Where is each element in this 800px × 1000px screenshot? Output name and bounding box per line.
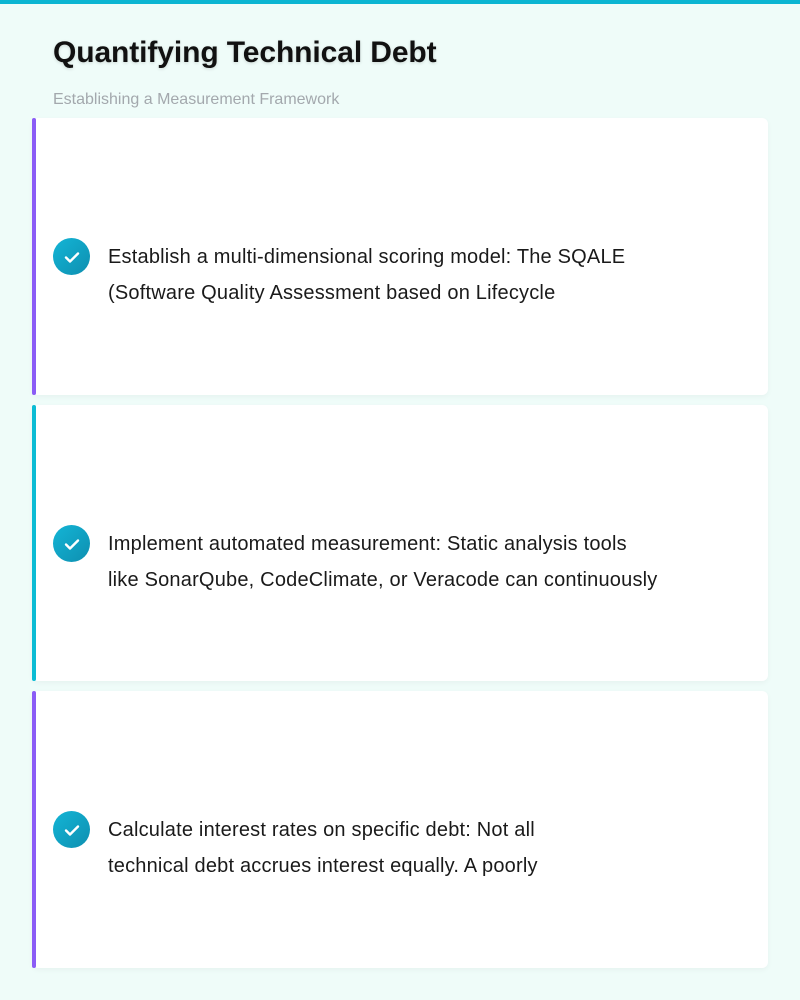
panel: card 3 <box>32 691 768 968</box>
icon: check <box>53 238 90 275</box>
item 1: (Software Quality Assessment based on Lifecycle <box>108 282 555 304</box>
item 1 <box>53 238 625 304</box>
item 2: like SonarQube, CodeClimate, or Veracode can continuously <box>108 569 658 591</box>
subtitle: Establishing a Measurement Framework <box>53 91 339 108</box>
panel: card 1 <box>32 118 768 395</box>
icon: check <box>53 525 90 562</box>
item 2 <box>53 525 658 591</box>
icon: check <box>53 811 90 848</box>
panel: card 2 <box>32 405 768 681</box>
item 2: Implement automated measurement: Static analysis tools <box>108 533 627 555</box>
item 3: technical debt accrues interest equally. A poorly <box>108 855 538 877</box>
item 3: Calculate interest rates on specific debt: Not all <box>108 819 535 841</box>
item 1: Establish a multi-dimensional scoring model: The SQALE <box>108 246 625 268</box>
item 3 <box>53 811 538 877</box>
title: Quantifying Technical Debt <box>53 36 437 69</box>
